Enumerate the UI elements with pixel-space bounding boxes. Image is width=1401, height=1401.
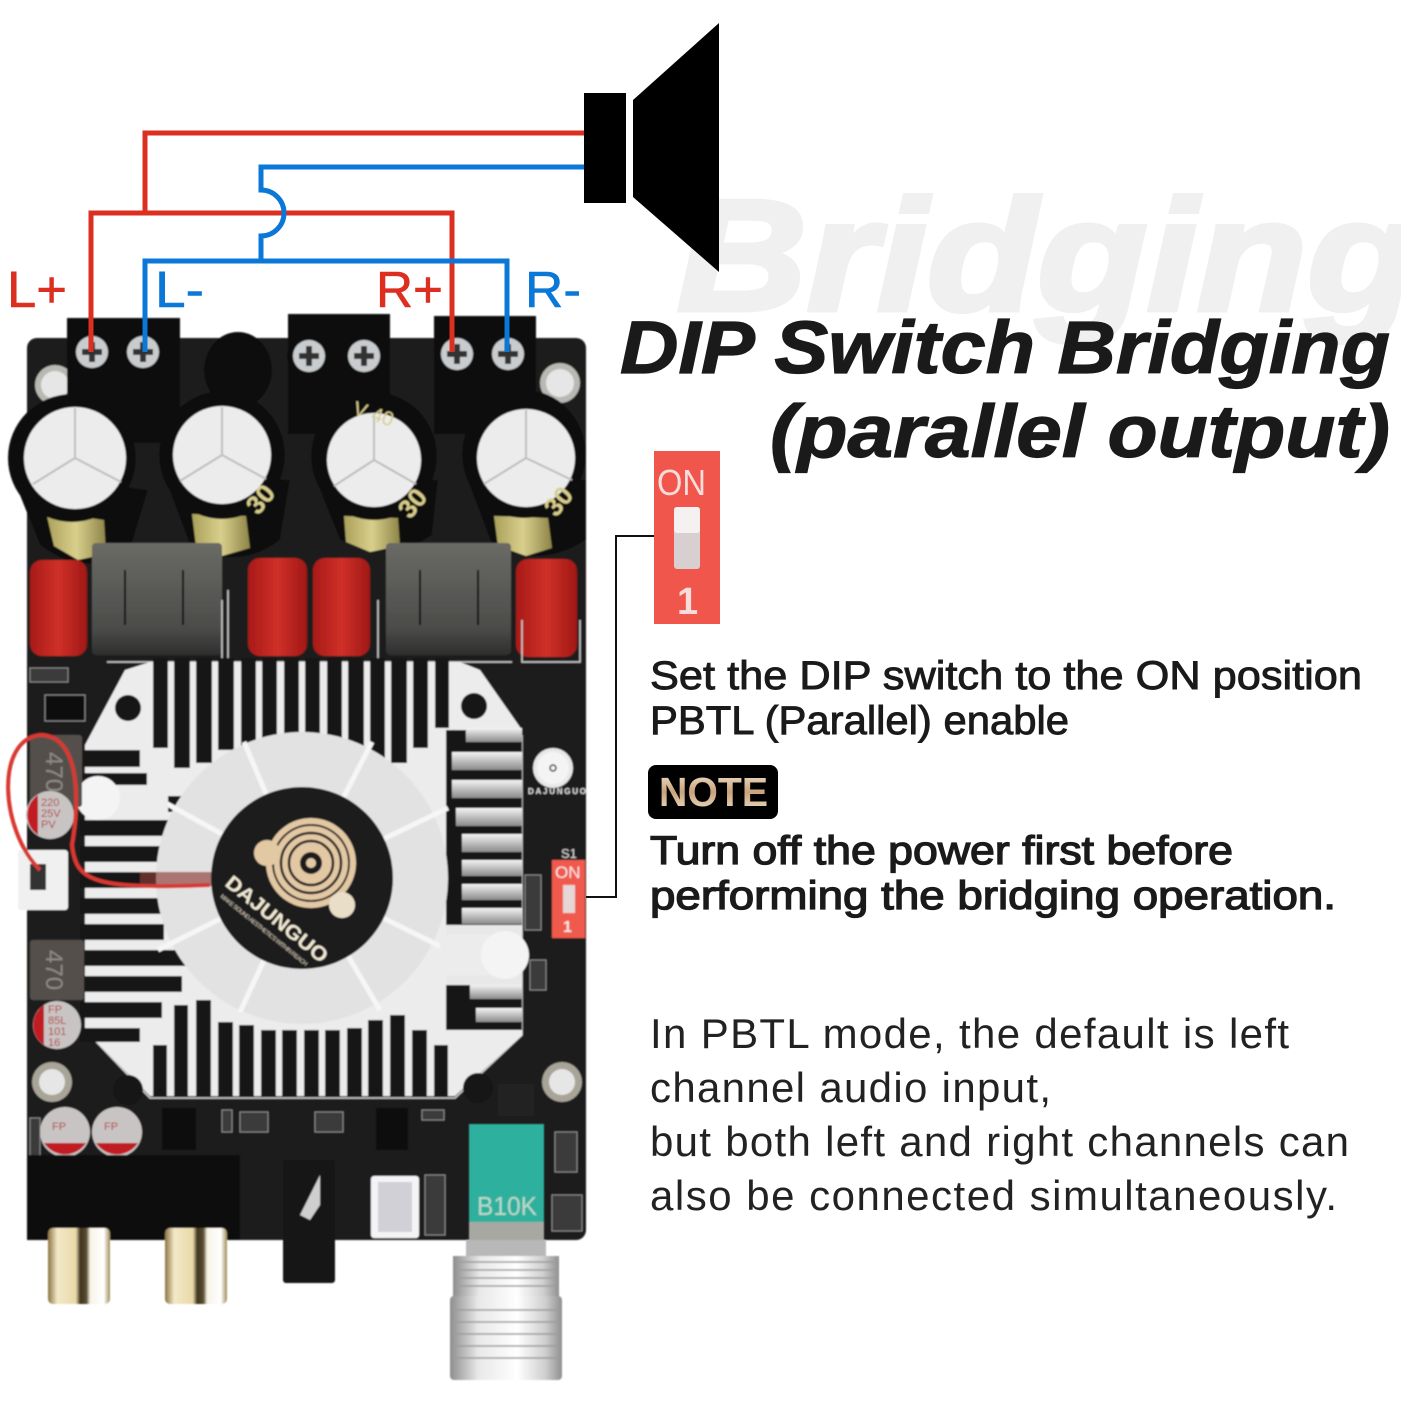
silkscreen outlines [85,590,580,1098]
corner notches [113,693,493,1105]
warning text [650,829,1336,918]
small electrolytic capacitors: 16 [48,1037,60,1049]
white input connector [371,1176,419,1238]
rca connectors [48,1228,227,1304]
small electrolytic capacitors: 220 [41,797,59,809]
brand logo on pcb [528,748,586,796]
pbtl mode explanation: In PBTL mode, the default is left [650,1010,1289,1057]
title [620,306,1390,473]
blue negative wires [145,167,584,352]
instruction text [650,654,1362,743]
instruction text: Set the DIP switch to the ON position [650,654,1362,698]
fan hub with logo [211,787,393,969]
pbtl mode explanation: channel audio input, [650,1064,1051,1111]
brand logo on pcb: DAJUNGUO [528,787,586,796]
electrolytic capacitors: 30 [240,478,281,520]
on-board dip switch: S1 [561,846,577,861]
wiring diagram [91,133,584,352]
electrolytic capacitors: V 40 [350,398,396,431]
icon: speaker [584,23,719,272]
left fin gaps [80,750,187,1042]
fan hub with logo: MAKE SOUND AESTHETICS WITHIN REACH [219,894,308,968]
power inductors 470: 470 [40,950,67,990]
pcb base [27,338,586,1240]
right fins [446,728,522,1030]
inductors [92,543,511,655]
power inductors 470 [30,735,84,1000]
pbtl mode explanation: also be connected simultaneously. [650,1172,1337,1219]
pot label: B10K [477,1191,538,1221]
note badge: NOTE [659,769,768,815]
small electrolytic capacitors: PV [41,819,56,831]
mounting holes [32,363,582,1102]
speaker terminal blocks [67,314,536,443]
on-board dip switch: 1 [563,919,572,936]
on-board dip switch: ON [555,863,580,882]
electrolytic capacitors: 30 [538,480,579,522]
small electrolytic capacitors: 101 [48,1026,66,1038]
bottom fin gaps [153,1000,448,1097]
small electrolytic capacitors: 25V [41,808,61,820]
watermark: Bridging: Bridging [677,168,1401,344]
knob [450,1240,562,1380]
enlarged dip switch: ON [657,462,706,503]
enlarged dip switch: 1 [677,581,698,623]
callout connector line [586,536,654,897]
pbtl mode explanation: but both left and right channels can [650,1118,1349,1165]
white posts [76,776,529,979]
small electrolytic capacitors: FP [52,1121,66,1133]
small electrolytic capacitors: FP [104,1121,118,1133]
title: DIP Switch Bridging [620,306,1390,389]
electrolytic capacitors: 30 [392,482,433,524]
heatsink [80,658,522,1105]
pot base strip [469,1222,544,1240]
fan power connector and red wire [8,735,210,910]
top fin gaps [153,658,449,768]
rca socket housing [27,1155,240,1240]
fan hub with logo: DAJUNGUO [221,872,332,968]
red positive wires [91,133,584,352]
power inductors 470: 470 [40,752,67,792]
pcb board photo [8,314,586,1304]
warning text: performing the bridging operation. [650,874,1336,918]
label: L+: L+ [7,261,67,318]
enlarged dip switch [654,451,720,624]
cooling fan [140,732,452,1024]
label: R+: R+ [376,261,443,318]
warning text: Turn off the power first before [650,829,1233,873]
pbtl mode explanation [650,1010,1349,1219]
small electrolytic capacitors [26,791,142,1157]
label: L-: L- [155,261,204,318]
3.5mm audio jack [283,1160,335,1283]
instruction text: PBTL (Parallel) enable [650,699,1069,743]
volume potentiometer [450,1124,562,1380]
title: (parallel output) [770,390,1390,473]
surface mount parts [30,668,582,1235]
electrolytic capacitors [8,390,586,564]
label: R-: R- [525,261,581,318]
on-board dip switch [552,846,585,938]
pot body [469,1124,544,1240]
red film capacitors [30,558,577,657]
small electrolytic capacitors: FP [48,1004,62,1016]
small electrolytic capacitors: 85L [48,1015,66,1027]
